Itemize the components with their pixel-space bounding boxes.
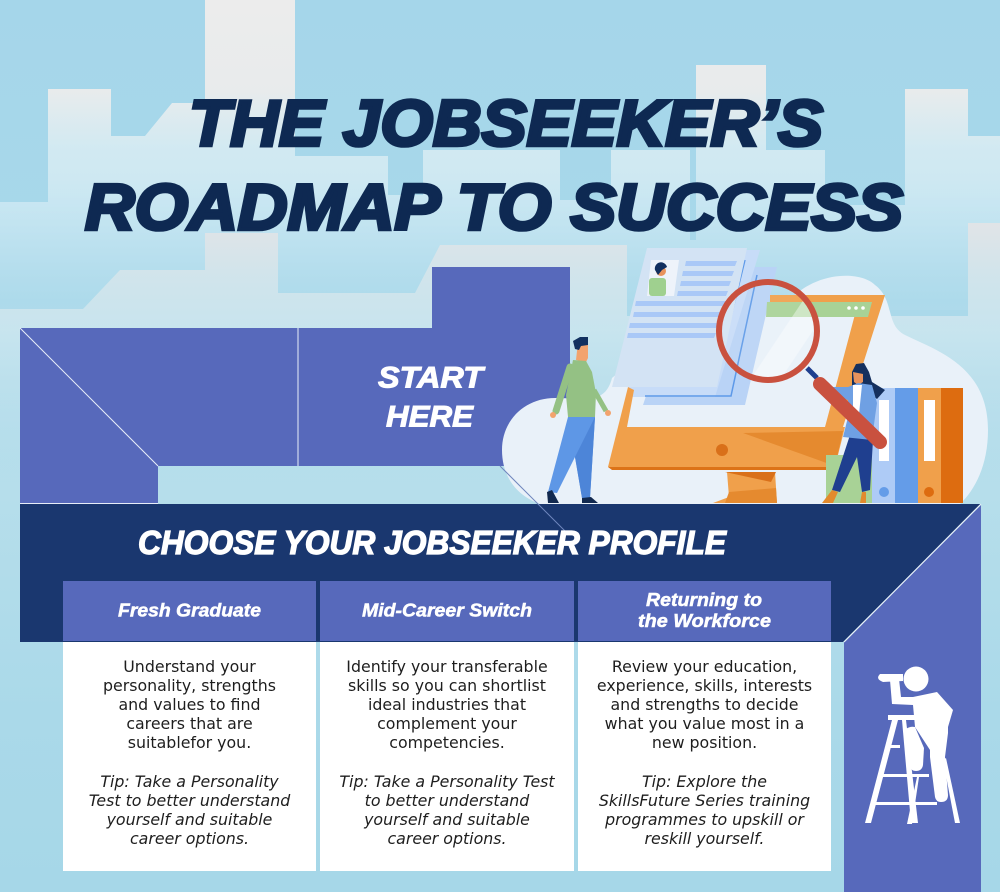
description: Review your education, [612, 657, 797, 676]
title [85, 86, 903, 244]
description: personality, strengths [103, 676, 276, 695]
panel: mid-career switch [320, 581, 574, 871]
icon: person on ladder with binoculars [865, 666, 960, 824]
start here label: HERE [386, 400, 474, 434]
description: careers that are [126, 714, 253, 733]
description: experience, skills, interests [597, 676, 812, 695]
tip: career options. [130, 829, 249, 848]
panel: fresh graduate [63, 581, 316, 871]
tip: Test to better understand [89, 791, 291, 810]
title: ROADMAP TO SUCCESS [85, 170, 903, 244]
tip: yourself and suitable [106, 810, 273, 829]
header [578, 581, 831, 641]
icon: monitor [608, 295, 885, 503]
right purple column [844, 505, 981, 892]
description: skills so you can shortlist [348, 676, 546, 695]
icon: magnifying glass [719, 282, 880, 442]
description: and values to find [118, 695, 261, 714]
section heading: CHOOSE YOUR JOBSEEKER PROFILE [138, 524, 727, 561]
description: new position. [652, 733, 757, 752]
header [63, 581, 316, 641]
icon: front resume sheet [612, 248, 747, 387]
description: suitablefor you. [128, 733, 251, 752]
tip: to better understand [365, 791, 530, 810]
icon: back resume sheets [628, 250, 777, 405]
start here label [378, 362, 486, 434]
description: and strengths to decide [611, 695, 798, 714]
icon: woman with magnifying glass [719, 282, 885, 503]
tip: reskill yourself. [645, 829, 764, 848]
background blob [502, 276, 988, 504]
tip: yourself and suitable [363, 810, 530, 829]
icon: folders [826, 388, 963, 503]
faint path line [500, 466, 565, 531]
tip: Tip: Explore the [642, 772, 767, 791]
tip: programmes to upskill or [604, 810, 805, 829]
card body [578, 642, 831, 871]
purple roadmap path [20, 267, 570, 504]
navy profile banner [20, 504, 981, 642]
start here label: START [378, 362, 486, 394]
header label: Mid-Career Switch [362, 600, 532, 620]
tip: career options. [387, 829, 507, 848]
tip: Tip: Take a Personality Test [339, 772, 555, 791]
description: competencies. [389, 733, 505, 752]
card body [63, 642, 316, 871]
header label [638, 590, 771, 631]
header label: the Workforce [638, 611, 771, 631]
diagonal highlight [844, 504, 981, 642]
title: THE JOBSEEKER’S [189, 86, 823, 160]
city skyline [0, 0, 1000, 490]
panel: returning to the workforce [578, 581, 831, 871]
card body [320, 642, 574, 871]
description: Identify your transferable [346, 657, 548, 676]
tip: Tip: Take a Personality [100, 772, 279, 791]
icon: man [547, 337, 611, 503]
header label: Fresh Graduate [118, 600, 261, 620]
illustration: computer, resume, people [502, 248, 988, 504]
tip: SkillsFuture Series training [599, 791, 810, 810]
description: complement your [377, 714, 517, 733]
header [320, 581, 574, 641]
description: what you value most in a [605, 714, 804, 733]
description: ideal industries that [368, 695, 526, 714]
description: Understand your [123, 657, 256, 676]
header label: Returning to [646, 590, 762, 610]
